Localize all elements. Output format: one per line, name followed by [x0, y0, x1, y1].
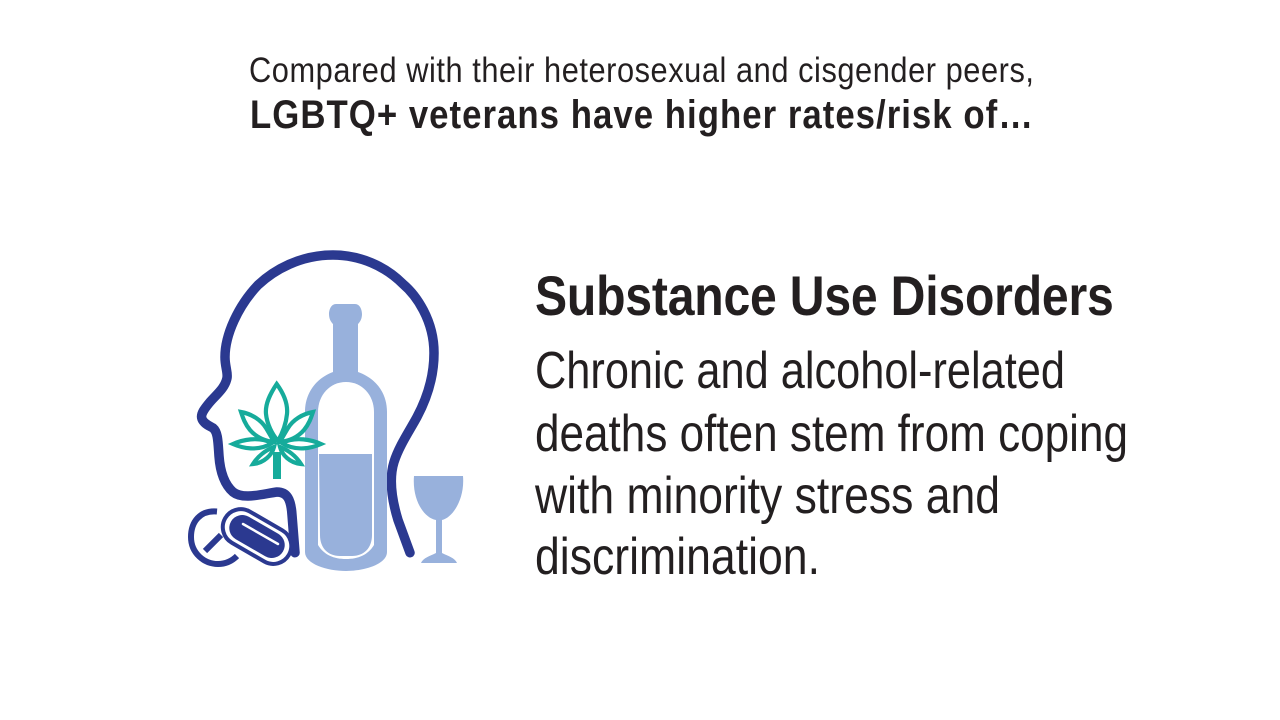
icon: wine glass [414, 476, 463, 563]
icon: pills [191, 503, 298, 570]
icon: wine bottle [305, 304, 387, 571]
body text: discrimination. [535, 528, 820, 586]
body text: deaths often stem from coping [535, 405, 1128, 463]
body text [534, 342, 1128, 586]
icon: head with substances [191, 255, 463, 571]
body text: Chronic and alcohol-related [535, 342, 1065, 400]
icon: cannabis leaf [233, 384, 321, 479]
body text: with minority stress and [534, 467, 1000, 525]
title: substance use disorders: Substance Use Disorders [535, 266, 1114, 328]
heading: Compared with their heterosexual and cisgender peers, [249, 50, 1034, 89]
icon: head outline [202, 255, 434, 553]
heading: LGBTQ+ veterans have higher rates/risk of… [250, 92, 1033, 137]
heading [249, 50, 1034, 137]
